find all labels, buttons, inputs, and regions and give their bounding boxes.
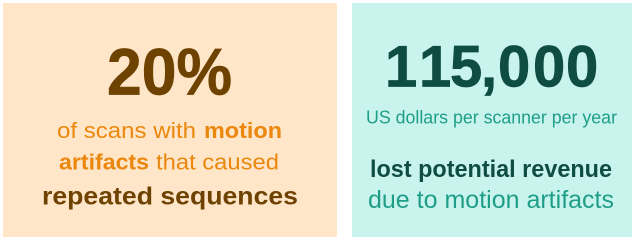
text line: artifacts that caused: artifacts xyxy=(59,150,149,174)
text line: artifacts that caused xyxy=(59,150,279,174)
text line: of scans with motion xyxy=(57,118,282,143)
panel: scans statistic xyxy=(3,3,337,237)
panel: revenue statistic xyxy=(352,3,632,237)
text line: artifacts that caused: that caused xyxy=(156,150,279,174)
text line: US dollars per scanner per year: US dollars per scanner per year xyxy=(366,106,617,128)
text line: of scans with motion: motion xyxy=(204,118,282,143)
text line: due to motion artifacts: due to motion artifacts xyxy=(368,186,614,214)
big number: 20%: 20% xyxy=(107,34,232,108)
big number: 115,000: 115,000 xyxy=(385,34,598,100)
text line: lost potential revenue: lost potential revenue xyxy=(370,156,612,183)
text line: of scans with motion: of scans with xyxy=(57,118,196,143)
text line: repeated sequences: repeated sequences xyxy=(42,182,298,210)
